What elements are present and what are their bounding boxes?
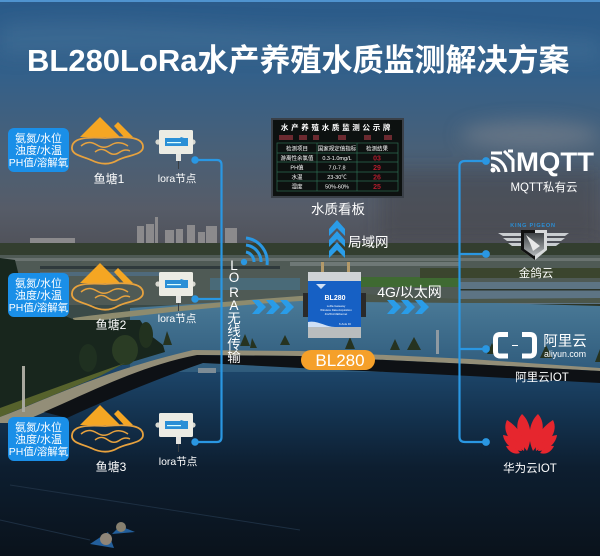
gateway device BL280: LoRa Gateway	[327, 304, 346, 308]
mid water	[130, 297, 600, 372]
parameters box 2: 浊度/水温	[15, 288, 62, 302]
parameters box 3	[8, 417, 69, 461]
farm ponds right	[460, 282, 600, 304]
gateway device BL280: Wireless Data Acquisition	[320, 308, 352, 312]
parameters box 3: PH值/溶解氧	[9, 445, 69, 458]
water quality display board: 水产养殖水质监测公示牌	[281, 122, 393, 132]
panel: pond 2	[8, 263, 196, 332]
vertical label: LORA wireless transmission: 传	[227, 337, 241, 352]
tree line	[0, 243, 600, 256]
parameters box 3: 浊度/水温	[15, 432, 62, 446]
pond 3 label: 鱼塘3	[96, 459, 127, 474]
parameters box 2	[8, 273, 69, 317]
dyke top	[0, 350, 600, 423]
arrows: LoRa to gateway	[252, 300, 294, 314]
water quality display board: 检测项目	[286, 144, 308, 152]
connector: cloud bus	[460, 158, 489, 445]
label: water quality board: 水质看板	[311, 202, 365, 217]
icon: pond 1	[72, 117, 143, 164]
pond 1 label: 鱼塘1	[94, 171, 125, 186]
vertical label: LORA wireless transmission: R	[229, 285, 239, 300]
logo: Aliyun: aliyun.com	[544, 349, 586, 359]
parameters box 3: 氨氮/水位	[15, 420, 62, 434]
gateway device BL280	[303, 262, 366, 338]
icon: pond 3	[72, 405, 143, 452]
panel: pond 3	[8, 405, 197, 474]
badge: BL280	[301, 350, 375, 370]
vertical label: LORA wireless transmission: L	[230, 258, 238, 273]
pond 2 label: 鱼塘2	[96, 317, 127, 332]
label: Huawei Cloud IoT: 华为云IOT	[503, 461, 557, 475]
label: LAN: 局域网	[348, 235, 388, 250]
label: 4G / Ethernet: 4G/以太网	[377, 284, 442, 300]
parameters box 1	[8, 128, 69, 172]
logo: King Pigeon	[498, 223, 569, 260]
water quality display board: 检测结果	[366, 144, 388, 152]
shore strip	[73, 293, 362, 324]
sensor 2 label: lora节点	[158, 313, 196, 325]
black liner band	[44, 355, 600, 418]
skyline	[30, 217, 237, 246]
vertical label: LORA wireless transmission: 无	[227, 311, 241, 326]
vertical label: LORA wireless transmission: 线	[227, 324, 241, 339]
icon: pond 2	[72, 263, 143, 310]
title: BL280LoRa水产养殖水质监测解决方案	[27, 43, 570, 78]
parameters box 1: PH值/溶解氧	[9, 156, 69, 169]
water quality display board: PH值	[290, 164, 304, 172]
water quality display board: 国家规定值指标	[318, 144, 357, 152]
parameters box 1: 浊度/水温	[15, 143, 62, 157]
logo: Huawei	[503, 414, 557, 454]
water quality display board: 水温	[291, 173, 303, 181]
sensor 3 label: lora节点	[159, 456, 197, 468]
logo: MQTT: MQTT	[516, 147, 595, 177]
vertical label: LORA wireless transmission: A	[229, 298, 239, 313]
gateway device BL280: 4G/Wi-Fi/Ethernet	[325, 312, 347, 316]
icon: lora sensor 1	[155, 130, 196, 169]
water quality display board: 0.3-1.0mg/L	[322, 156, 352, 162]
gateway device BL280: BL280	[324, 295, 346, 302]
logo: King Pigeon: KING PIGEON	[510, 223, 556, 229]
arrows: gateway to cloud	[387, 300, 429, 314]
arrow: gateway up to dashboard	[329, 220, 345, 258]
panel: pond 1	[8, 117, 196, 186]
farmland	[0, 255, 600, 305]
label: Aliyun IoT: 阿里云IOT	[515, 371, 569, 384]
grass strip	[0, 363, 125, 417]
water quality display board: 7.0-7.8	[328, 166, 346, 172]
vertical label: LORA wireless transmission	[227, 258, 241, 365]
gateway device BL280: 6 Axis IO	[339, 322, 352, 326]
forest	[0, 258, 165, 410]
badge: BL280: BL280	[315, 351, 365, 370]
label: King Pigeon cloud: 金鸽云	[519, 266, 553, 280]
water quality display board: 游离性余氯值	[280, 154, 314, 162]
connector: LoRa bus	[192, 157, 222, 445]
sensor 1 label: lora节点	[158, 173, 196, 185]
water quality display board	[271, 118, 404, 198]
parameters box 2: PH值/溶解氧	[9, 301, 69, 314]
logo: Aliyun: 阿里云	[543, 333, 587, 350]
water quality display board: 25	[373, 184, 381, 191]
water quality display board: 50%-60%	[325, 184, 349, 190]
water quality display board: 29	[373, 165, 381, 172]
icon: lora sensor 2	[155, 272, 196, 311]
icon: lora sensor 3	[155, 413, 196, 452]
parameters box 2: 氨氮/水位	[15, 276, 62, 290]
aerator boat	[90, 526, 135, 548]
label: MQTT private cloud: MQTT私有云	[510, 180, 578, 194]
water quality display board: 23-30℃	[327, 174, 347, 181]
water quality display board: 03	[373, 156, 381, 162]
vertical label: LORA wireless transmission: O	[229, 270, 239, 285]
parameters box 1: 氨氮/水位	[15, 131, 62, 145]
water quality display board: 湿度	[291, 182, 303, 190]
small trees along the dyke	[163, 331, 600, 362]
icon: wireless signal	[241, 238, 267, 265]
vertical label: LORA wireless transmission: 输	[227, 350, 241, 365]
logo: Aliyun	[496, 333, 587, 359]
water quality display board: 26	[373, 174, 381, 182]
